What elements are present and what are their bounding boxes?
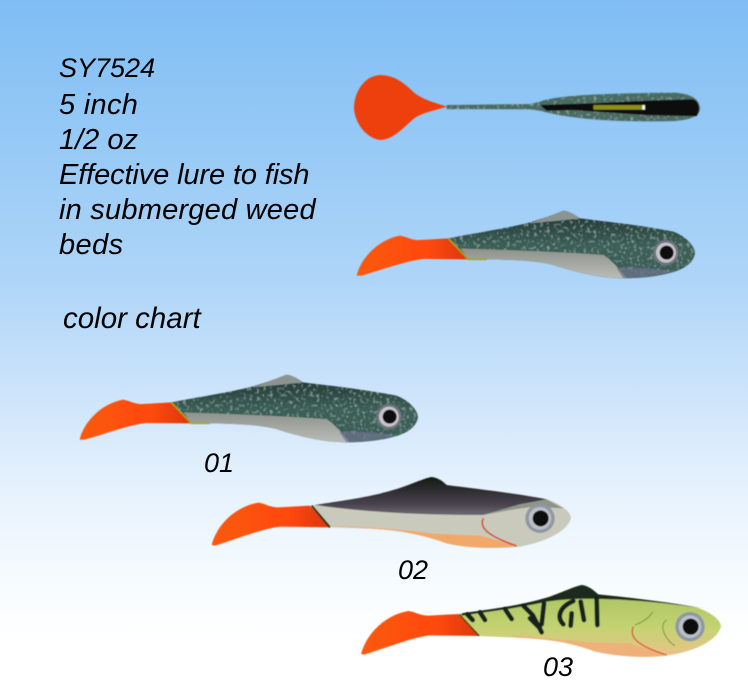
dark back (315, 477, 547, 515)
gill line (482, 518, 517, 546)
eye (675, 612, 705, 641)
dorsal fin (253, 375, 303, 387)
yellow insert (593, 105, 643, 110)
lure: side view (357, 211, 695, 278)
eye (376, 404, 402, 429)
product specification text: Effective lure to fish (59, 159, 309, 191)
tail (357, 236, 468, 276)
tail (361, 611, 479, 655)
product specification text: beds (59, 229, 124, 261)
dark slit (540, 99, 699, 116)
eye (525, 504, 555, 533)
color chart heading: color chart (63, 302, 201, 335)
lure 02 (212, 477, 571, 548)
product specification text: SY7524 (59, 53, 155, 83)
lure: top view (354, 75, 700, 140)
dorsal fin (530, 211, 580, 223)
lure 03 (361, 585, 721, 657)
body (458, 585, 721, 657)
paddle tail (354, 75, 447, 140)
product specification text: 5 inch (59, 89, 138, 121)
yellow join (171, 402, 210, 423)
gill lines (632, 612, 675, 655)
product specification text: 1/2 oz (59, 124, 138, 156)
head speckle (483, 499, 563, 515)
body (171, 375, 418, 442)
lilac chin (617, 268, 673, 278)
product specification text: in submerged weed (59, 194, 316, 226)
tiger stripes (467, 598, 597, 632)
belly (461, 248, 627, 278)
tail join (459, 614, 479, 636)
dark dorsal (462, 585, 703, 616)
body (310, 477, 571, 548)
body (448, 211, 695, 278)
orange belly (330, 526, 517, 548)
belly (184, 412, 350, 442)
label: color 01: 01 (204, 448, 234, 478)
label: color 02: 02 (398, 555, 428, 585)
tail (212, 503, 330, 546)
slim body (447, 93, 700, 121)
yellow join (448, 238, 487, 259)
tail (80, 400, 191, 440)
eye (653, 240, 679, 265)
orange belly (510, 635, 667, 657)
lure 01 (80, 375, 418, 442)
product specification text (59, 53, 316, 261)
lilac chin (340, 432, 396, 442)
label: color 03: 03 (543, 652, 573, 682)
tail join (312, 506, 330, 527)
